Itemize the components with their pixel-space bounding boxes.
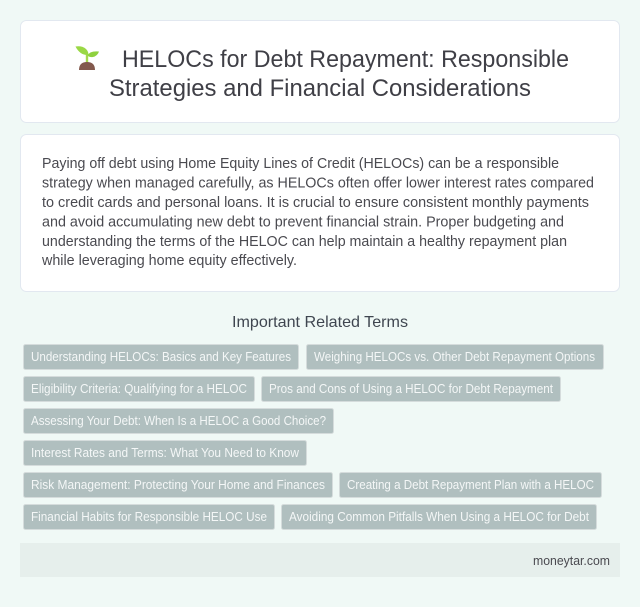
tag list: Interest Rates and Terms: What You Need to Know bbox=[31, 446, 300, 460]
title: HELOCs for Debt Repayment: Responsible bbox=[122, 46, 569, 73]
heading: important related terms: Important Related Terms bbox=[232, 314, 408, 331]
paragraph text: understanding the terms of the HELOC can help maintain a healthy repayment plan bbox=[42, 234, 567, 250]
paragraph text: while leveraging home equity effectively. bbox=[41, 253, 297, 269]
tag list: Avoiding Common Pitfalls When Using a HELOC for Debt bbox=[289, 510, 589, 524]
footer bbox=[20, 543, 620, 577]
tag list: Understanding HELOCs: Basics and Key Features bbox=[31, 350, 291, 364]
paragraph text: strategy when managed carefully, as HELOCs often offer lower interest rates compared bbox=[42, 176, 594, 192]
tag list: Weighing HELOCs vs. Other Debt Repayment Options bbox=[314, 350, 595, 364]
tag list: Pros and Cons of Using a HELOC for Debt Repayment bbox=[269, 382, 553, 396]
title bbox=[109, 46, 569, 102]
paragraph text: and avoid accumulating new debt to prevent financial strain. Proper budgeting and bbox=[42, 214, 564, 230]
icon: seedling bbox=[76, 46, 99, 70]
tag list: Eligibility Criteria: Qualifying for a HELOC bbox=[31, 382, 247, 396]
tag list: Creating a Debt Repayment Plan with a HELOC bbox=[347, 478, 594, 492]
panel: title card bbox=[20, 20, 620, 122]
tag list: Assessing Your Debt: When Is a HELOC a Good Choice? bbox=[31, 414, 326, 428]
tag list bbox=[24, 344, 604, 530]
paragraph text: Paying off debt using Home Equity Lines of Credit (HELOCs) can be a responsible bbox=[42, 156, 559, 172]
footer: moneytar.com bbox=[533, 553, 610, 568]
paragraph text: to credit cards and personal loans. It is crucial to ensure consistent monthly payments bbox=[42, 195, 589, 211]
panel: intro paragraph bbox=[20, 134, 620, 292]
tag list: Financial Habits for Responsible HELOC Use bbox=[31, 510, 267, 524]
title: Strategies and Financial Considerations bbox=[109, 75, 531, 102]
paragraph text bbox=[41, 156, 594, 269]
tag list: Risk Management: Protecting Your Home and Finances bbox=[31, 478, 325, 492]
